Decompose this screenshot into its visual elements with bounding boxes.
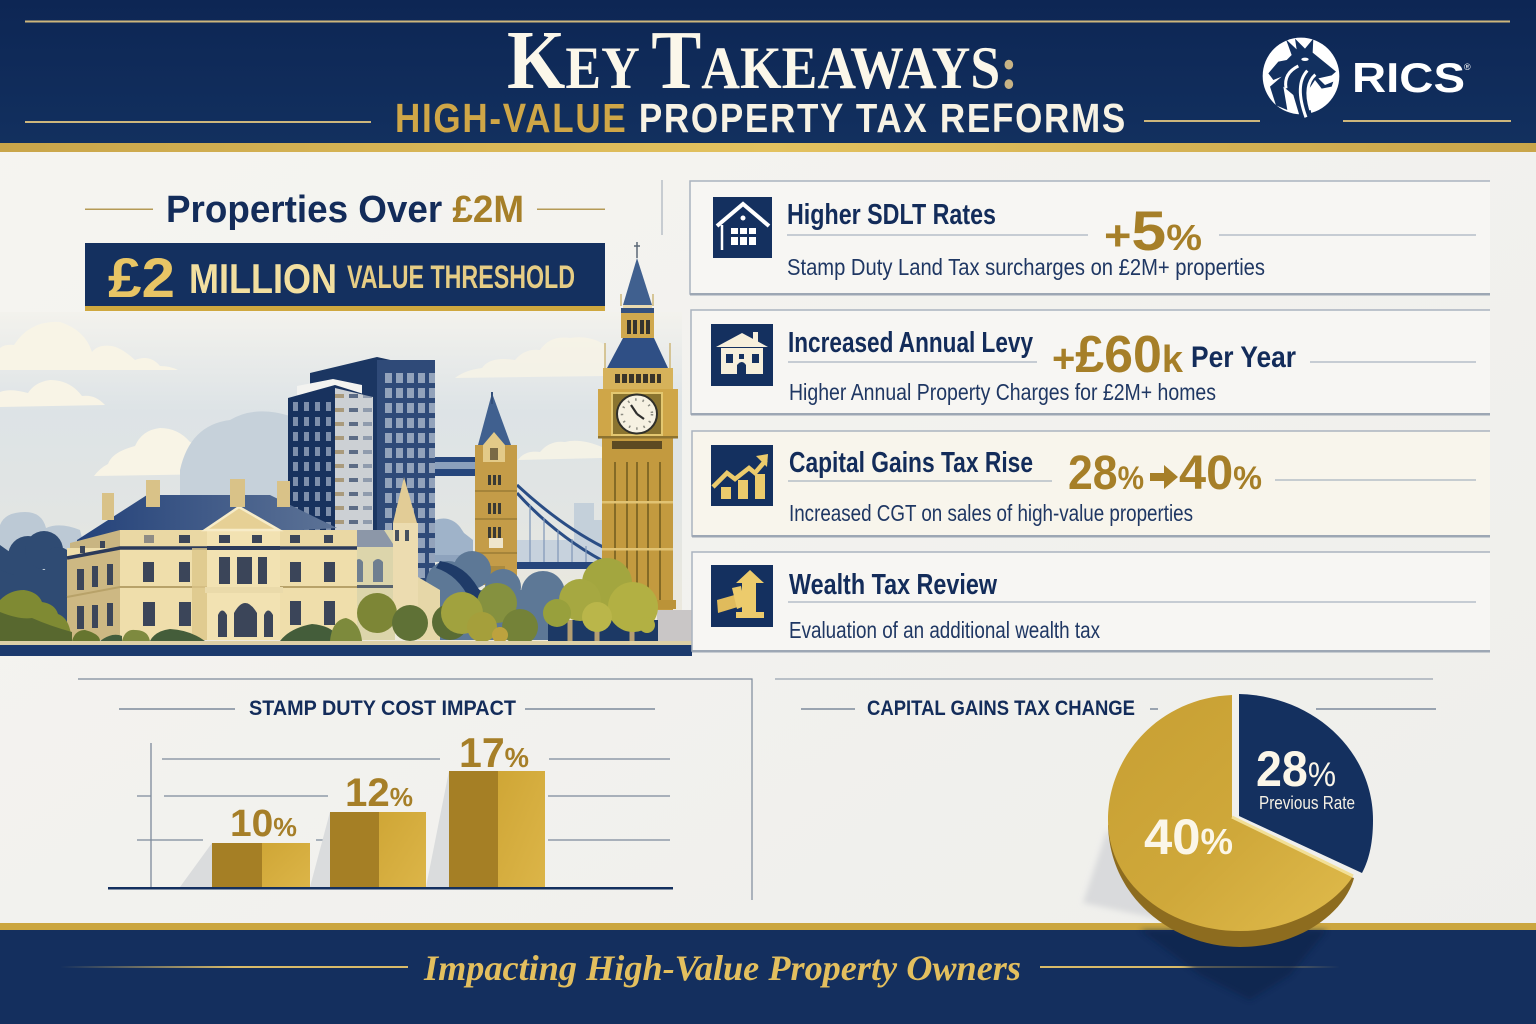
tower bridge: [435, 392, 603, 585]
bar: 12 percent: [330, 771, 426, 887]
trees: [0, 558, 692, 656]
card: Increased Annual Levy: Per Year: [1191, 341, 1296, 374]
card: Wealth Tax Review: Wealth Tax Review: [789, 569, 997, 601]
bar: 17 percent: 17%: [459, 729, 529, 776]
icon: house outline: [713, 197, 772, 258]
footer banner: [0, 923, 1536, 1024]
card: Capital Gains Tax Rise: 40%: [1179, 447, 1262, 500]
bar: 17 percent: [449, 729, 545, 887]
panel: stamp duty chart frame: [78, 679, 752, 900]
rear blue trees: [426, 551, 658, 642]
card: Higher SDLT Rates: Stamp Duty Land Tax surcharges on £2M+ properties: [787, 254, 1265, 280]
card: Capital Gains Tax Rise: 28%: [1068, 447, 1144, 500]
card: Capital Gains Tax Rise: [692, 431, 1490, 538]
card: Higher SDLT Rates: Higher SDLT Rates: [787, 199, 996, 231]
subtitle: HIGH-VALUE PROPERTY TAX REFORMS: [395, 95, 1127, 141]
threshold banner: VALUE THRESHOLD: [347, 259, 575, 295]
logo: RICS: RICS: [1352, 54, 1465, 101]
far right low buildings: [657, 610, 692, 642]
bar: 10 percent: [212, 803, 310, 887]
icon: solid house: [711, 324, 773, 386]
rear dark trees left: [0, 531, 75, 630]
heading: stamp duty cost impact: STAMP DUTY COST IMPACT: [249, 697, 516, 720]
card: Wealth Tax Review: Evaluation of an additional wealth tax: [789, 617, 1100, 643]
arrow: [1150, 465, 1178, 489]
big ben: [598, 242, 678, 610]
card: Wealth Tax Review: [692, 552, 1490, 652]
card: Capital Gains Tax Rise: Capital Gains Tax Rise: [789, 447, 1033, 479]
pie chart: capital gains 28 to 40 percent: 28%: [1256, 741, 1336, 797]
clouds: [0, 322, 605, 476]
mansion: [67, 479, 395, 640]
card: Higher SDLT Rates: +5%: [1104, 199, 1202, 262]
heading: capital gains tax change: CAPITAL GAINS TAX CHANGE: [867, 697, 1135, 720]
threshold banner: MILLION: [189, 255, 337, 302]
bar: 12 percent: 12%: [345, 771, 413, 815]
footer text: Impacting High-Value Property Owners: [423, 948, 1021, 988]
header banner: [0, 0, 1536, 152]
icon: rising chart: [711, 445, 773, 506]
distant hills: [0, 411, 604, 590]
threshold banner: [85, 243, 605, 311]
logo: RICS: ®: [1464, 62, 1471, 72]
bar: 10 percent: 10%: [230, 803, 297, 845]
card: Increased Annual Levy: Higher Annual Property Charges for £2M+ homes: [789, 379, 1216, 405]
icon: gavel and arrow: [711, 565, 773, 627]
church steeple: [393, 477, 440, 640]
title: KEY TAKEAWAYS:: [507, 14, 1018, 107]
card: Increased Annual Levy: [691, 310, 1490, 416]
pie chart: capital gains 28 to 40 percent: 40%: [1144, 809, 1233, 865]
panel: capital gains frame line: [775, 678, 1433, 680]
threshold banner: £2: [108, 246, 175, 309]
slice: 28 percent navy: [1239, 694, 1373, 873]
tower block front: [288, 379, 373, 540]
left heading: properties over 2M: Properties Over £2M: [166, 189, 524, 231]
card: Increased Annual Levy: Increased Annual Levy: [788, 327, 1033, 359]
vertical divider: [662, 180, 663, 235]
bar chart: stamp duty: [108, 729, 673, 890]
pie chart: capital gains 28 to 40 percent: Previous Rate: [1259, 793, 1355, 813]
pie chart: capital gains 28 to 40 percent: [1083, 694, 1373, 1000]
logo: RICS: [1263, 38, 1471, 117]
illustration: London skyline: [0, 242, 692, 656]
tower block rear: [310, 357, 435, 600]
logo mark: lion: [1263, 38, 1339, 117]
card: Increased Annual Levy: +£60k: [1052, 326, 1184, 384]
card: Higher SDLT Rates: [690, 181, 1490, 296]
card: Capital Gains Tax Rise: Increased CGT on sales of high-value properties: [789, 500, 1193, 526]
slice: 40 percent gold: [1108, 695, 1353, 931]
